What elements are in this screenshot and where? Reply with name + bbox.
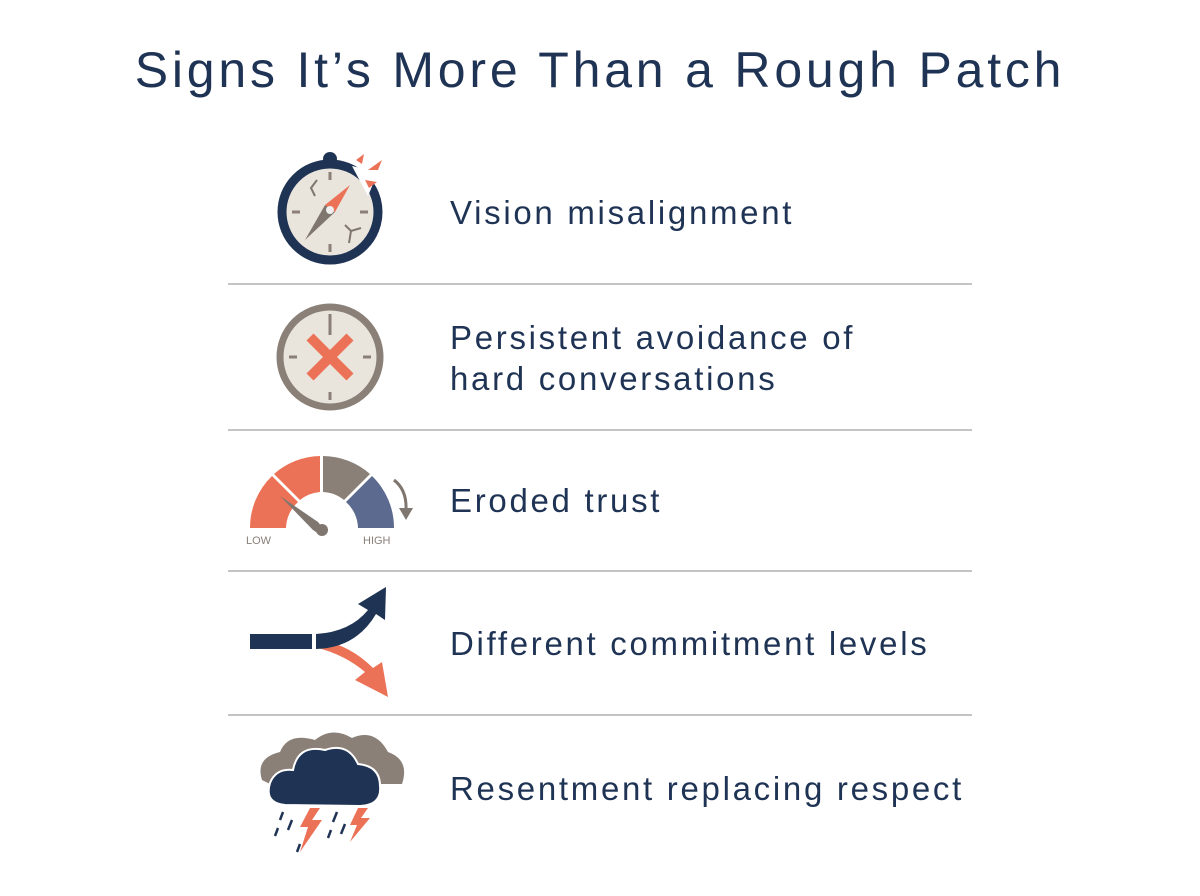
text: avoidance <box>450 319 855 397</box>
text: eroded trust: Eroded trust <box>450 482 662 519</box>
title: Signs It’s More Than a Rough Patch <box>135 42 1065 98</box>
icon: diverging arrows <box>250 587 388 697</box>
icon: crossed clock <box>280 307 380 407</box>
icon: storm cloud <box>260 732 404 852</box>
text: avoidance: Persistent avoidance of <box>450 319 855 356</box>
icon: trust gauge: LOW <box>246 535 272 547</box>
icon: trust gauge: HIGH <box>363 535 391 547</box>
icon: broken compass <box>282 152 382 260</box>
icon: trust gauge <box>246 456 413 547</box>
text: resentment: Resentment replacing respect <box>450 770 964 807</box>
text: avoidance: hard conversations <box>450 360 777 397</box>
text: commitment: Different commitment levels <box>450 625 929 662</box>
text: vision misalignment: Vision misalignment <box>450 194 794 231</box>
